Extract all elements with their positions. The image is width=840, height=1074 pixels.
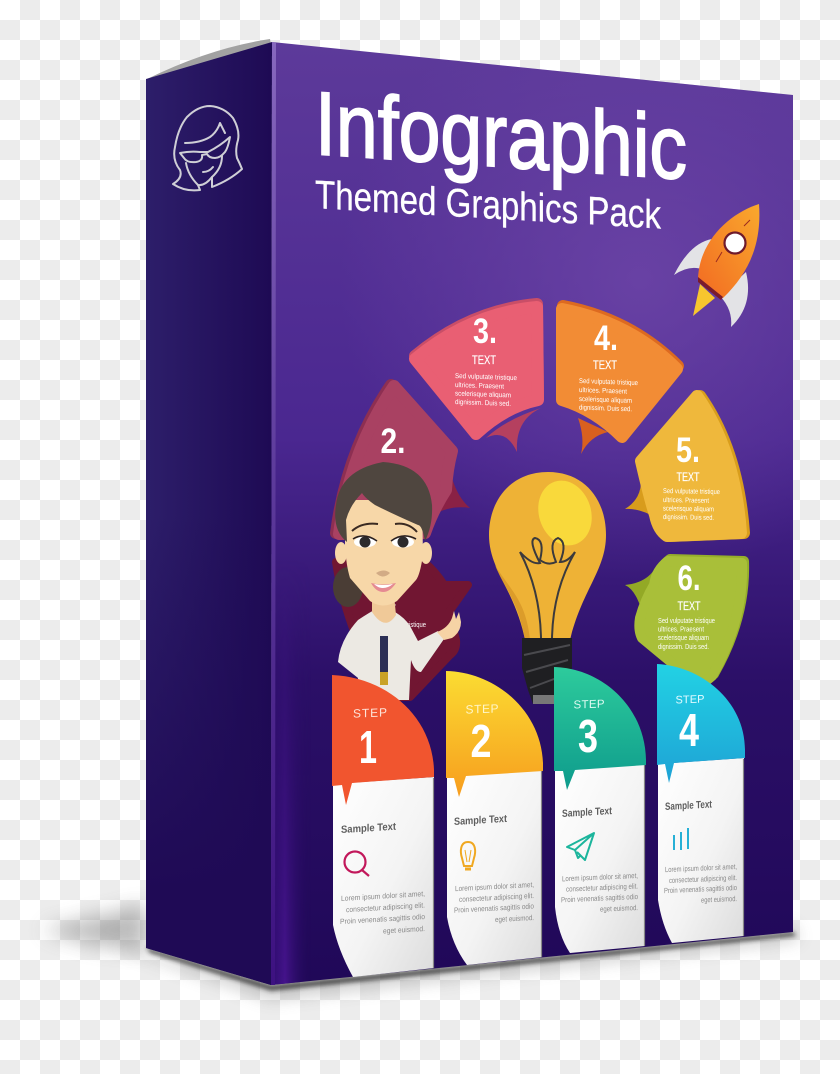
card header bbox=[554, 667, 646, 790]
segment 4: scelerisque aliquam bbox=[579, 396, 632, 405]
title bbox=[315, 73, 687, 238]
segment 4: 4. bbox=[594, 319, 618, 358]
jacket bbox=[338, 608, 444, 700]
segment 6: scelerisque aliquam bbox=[658, 635, 709, 642]
segment 5: ultrices. Praesent bbox=[663, 497, 709, 505]
card body bbox=[333, 777, 434, 977]
step card 1 bbox=[332, 675, 434, 977]
eyebrows bbox=[352, 524, 417, 532]
step card 3: STEP bbox=[574, 698, 605, 712]
step card 2: Lorem ipsum dolor sit amet, bbox=[455, 880, 534, 893]
step card 1: Lorem ipsum dolor sit amet, bbox=[341, 889, 425, 903]
icon: bulb bbox=[461, 842, 475, 869]
step card 4: Proin venenatis sagittis odio bbox=[664, 883, 737, 895]
icon: magnifier bbox=[344, 852, 369, 876]
step card 2 bbox=[446, 671, 543, 965]
title main line: Infographic bbox=[315, 73, 687, 199]
segment 6 bbox=[625, 559, 744, 686]
card header bbox=[657, 664, 745, 783]
step card 2: 2 bbox=[470, 715, 492, 767]
subtitle: Themed Graphics Pack bbox=[315, 173, 662, 238]
segment 3: scelerisque aliquam bbox=[455, 391, 511, 399]
segment 6: dignissim. Duis sed. bbox=[658, 644, 709, 651]
segment 2 bbox=[336, 385, 470, 534]
box shadow on the floor bbox=[40, 905, 800, 1000]
step card 4: consectetur adipiscing elit. bbox=[669, 873, 737, 885]
step card 4: Lorem ipsum dolor sit amet, bbox=[665, 862, 737, 874]
icon: woman with glasses logo bbox=[173, 106, 242, 190]
step card 1: STEP bbox=[353, 705, 387, 721]
segment 3 bbox=[415, 304, 541, 452]
card body bbox=[555, 764, 645, 953]
segment 6: Sed vulputate tristique bbox=[658, 618, 715, 625]
step card 2: Proin venenatis sagittis odio bbox=[454, 902, 534, 915]
segment 4: dignissim. Duis sed. bbox=[579, 405, 632, 413]
step card 2: consectetur adipiscing elit. bbox=[459, 891, 534, 904]
segment 3: 3. bbox=[473, 312, 497, 351]
tie clip bbox=[380, 672, 388, 685]
icon: light bulb bbox=[489, 472, 606, 704]
segment 3: TEXT bbox=[472, 353, 497, 367]
segment 4: ultrices. Praesent bbox=[579, 387, 627, 396]
segment 5: scelerisque aliquam bbox=[663, 506, 714, 513]
segment 1 bbox=[336, 562, 468, 697]
card body bbox=[447, 770, 542, 965]
icon: bar chart bbox=[674, 828, 688, 850]
step card 3: Lorem ipsum dolor sit amet, bbox=[562, 871, 638, 883]
step card 1: consectetur adipiscing elit. bbox=[346, 901, 425, 914]
face bbox=[345, 500, 423, 606]
segment 6: ultrices. Praesent bbox=[658, 626, 704, 634]
icon: rocket bbox=[674, 204, 759, 327]
card header bbox=[446, 671, 543, 797]
infographic arc of six segments bbox=[336, 304, 744, 697]
tie bbox=[380, 636, 388, 672]
mouth bbox=[371, 583, 396, 592]
step card 2: STEP bbox=[466, 701, 498, 717]
segment 1: TEXT bbox=[372, 602, 397, 616]
step card 1: eget euismod. bbox=[383, 924, 425, 935]
segment 4: TEXT bbox=[593, 358, 618, 372]
step card 2: eget euismod. bbox=[495, 913, 534, 924]
hair bun bbox=[333, 567, 363, 607]
segment 5: dignissim. Duis sed. bbox=[663, 514, 714, 522]
segment 5 bbox=[625, 396, 744, 536]
segment 2: 2. bbox=[380, 422, 406, 461]
step card 3: 3 bbox=[578, 710, 598, 762]
segment 3: ultrices. Praesent bbox=[455, 382, 504, 391]
segment 5: TEXT bbox=[676, 470, 700, 484]
step card 1: Proin venenatis sagittis odio bbox=[340, 912, 425, 926]
box front face bbox=[271, 42, 793, 985]
card body bbox=[658, 758, 744, 943]
ear right bbox=[420, 542, 432, 564]
eyes bbox=[353, 536, 416, 548]
segment 5: 5. bbox=[676, 431, 700, 470]
step card 3: consectetur adipiscing elit. bbox=[566, 882, 638, 894]
step card 4: STEP bbox=[675, 693, 705, 707]
segment 6: 6. bbox=[678, 559, 700, 598]
segment 4: Sed vulputate tristique bbox=[579, 378, 638, 387]
step card 4: eget euismod. bbox=[701, 894, 737, 905]
segment 3: Sed vulputate tristique bbox=[455, 373, 517, 382]
step card 4: 4 bbox=[679, 704, 699, 756]
step card 2: Sample Text bbox=[454, 813, 507, 828]
icon: paper plane bbox=[567, 833, 594, 860]
step card 3 bbox=[554, 667, 646, 953]
segment 6: TEXT bbox=[678, 599, 701, 613]
card header bbox=[332, 675, 434, 805]
step card 4: Sample Text bbox=[665, 799, 712, 813]
box left side face bbox=[146, 39, 272, 985]
step card 1: Sample Text bbox=[341, 821, 396, 836]
segment 1: Sed vulputate tristique bbox=[368, 622, 426, 629]
segment 4 bbox=[562, 306, 678, 454]
step card 4 bbox=[657, 664, 745, 943]
hand bbox=[437, 611, 461, 640]
step card 3: eget euismod. bbox=[600, 903, 638, 914]
woman character bbox=[333, 462, 461, 700]
neck bbox=[372, 595, 396, 623]
step card 1: 1 bbox=[359, 721, 377, 773]
segment 3: dignissim. Duis sed. bbox=[455, 399, 511, 408]
hair bbox=[335, 462, 432, 542]
step card 3: Sample Text bbox=[562, 805, 612, 820]
nose bbox=[376, 570, 390, 576]
step card 3: Proin venenatis sagittis odio bbox=[561, 892, 638, 904]
segment 5: Sed vulputate tristique bbox=[663, 488, 720, 496]
ear left bbox=[335, 542, 347, 564]
